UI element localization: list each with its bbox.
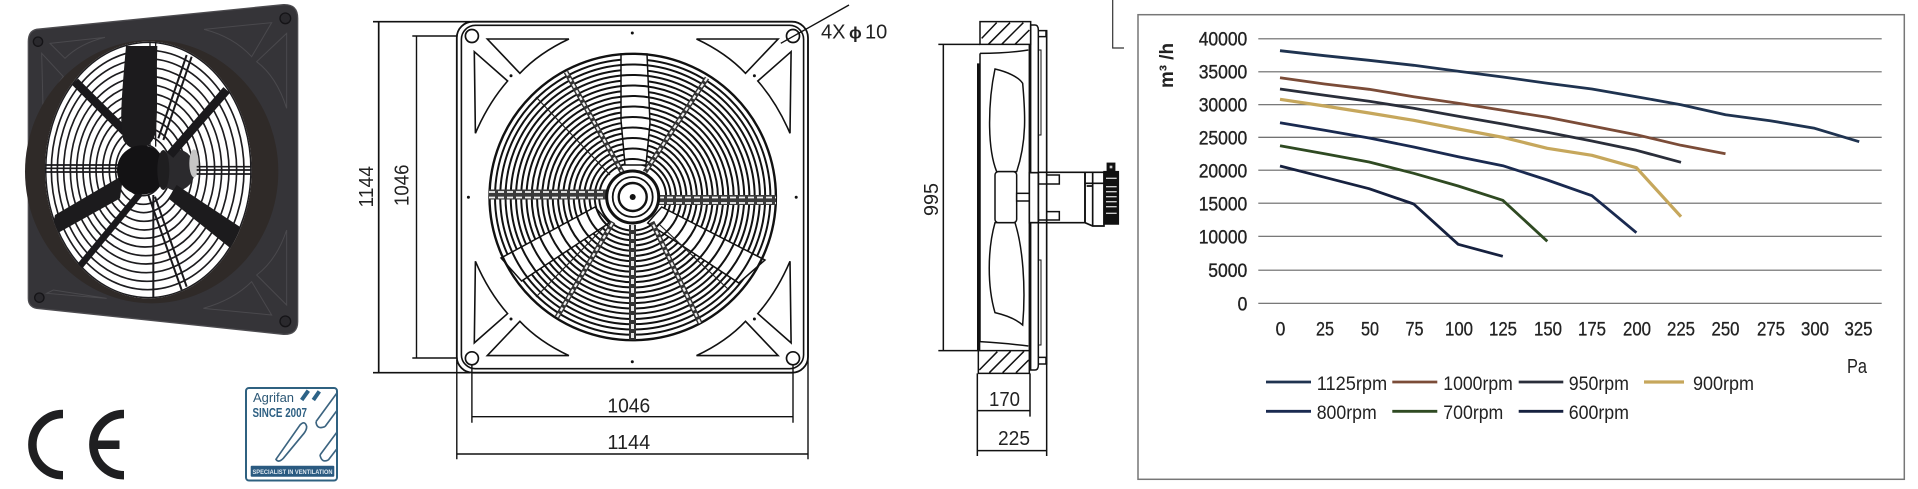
x axis labels: [1276, 320, 1872, 340]
y axis labels: 35000: [1199, 62, 1247, 84]
y axis labels: 20000: [1199, 162, 1247, 182]
guard rings: [46, 42, 251, 298]
venturi ring: [25, 40, 278, 303]
legend: [1266, 374, 1754, 424]
label: depth 225: 225: [998, 428, 1030, 450]
legend 600rpm: [1519, 403, 1629, 424]
corner cutouts: [474, 39, 791, 356]
label: hole spacing 1046 vertical: 1046: [392, 164, 414, 206]
outer frame: [457, 22, 808, 373]
label: depth 170: 170: [989, 389, 1020, 411]
x axis labels: 50: [1361, 320, 1379, 340]
motor body: [1029, 31, 1118, 364]
panel dots: [467, 32, 798, 363]
y axis labels: 40000: [1199, 30, 1247, 50]
curve 1000rpm: [1280, 78, 1726, 154]
corner bolts: [33, 13, 291, 327]
legend 800rpm: 800rpm: [1317, 403, 1377, 424]
CE mark: [32, 414, 124, 475]
x axis labels: 125: [1489, 320, 1517, 340]
y axis labels: 30000: [1199, 96, 1247, 116]
letter C: [32, 414, 63, 475]
y axis labels: 15000: [1199, 194, 1247, 216]
legend 700rpm: 700rpm: [1443, 403, 1503, 424]
y axis labels: 0: [1238, 294, 1247, 316]
mounting plate: [1031, 25, 1038, 370]
curves: [1280, 51, 1859, 256]
legend 1000rpm: [1392, 374, 1513, 395]
inner frame: [461, 25, 804, 369]
lower blade: [989, 223, 1024, 325]
upper blade: [990, 69, 1025, 172]
legend 700rpm: [1392, 403, 1503, 424]
badge since: SINCE 2007: [252, 406, 307, 420]
curve 950rpm: [1280, 89, 1681, 162]
mounting holes: [465, 30, 800, 365]
struts: [45, 42, 253, 298]
legend 1125rpm: [1266, 374, 1387, 395]
product photo: axial fan: [25, 5, 298, 334]
grid lines: [1258, 39, 1882, 303]
label: hole callout: ϕ: [849, 23, 862, 42]
legend 800rpm: [1266, 403, 1377, 424]
x axis title: Pa: [1847, 356, 1868, 378]
badge brand: Agrifan: [253, 390, 294, 405]
hatched top section: [980, 22, 1031, 44]
guard secondary rings: [495, 59, 770, 335]
x axis labels: 0: [1276, 320, 1285, 340]
x axis labels: 225: [1667, 320, 1695, 340]
y axis title: m³ /h: [1157, 43, 1178, 88]
x axis labels: 175: [1578, 320, 1606, 340]
legend 950rpm: 950rpm: [1569, 374, 1629, 395]
x axis labels: 200: [1623, 320, 1651, 340]
x axis labels: 150: [1534, 320, 1562, 340]
curve 1125rpm: [1280, 51, 1859, 142]
label: diameter 995: 995: [921, 183, 943, 216]
legend 1000rpm: 1000rpm: [1443, 374, 1513, 395]
side view technical drawing: [938, 22, 1118, 456]
y axis labels: [1199, 30, 1247, 316]
curve 900rpm: [1280, 99, 1681, 217]
Agrifan badge: [246, 388, 337, 480]
shaft: [1017, 193, 1029, 201]
opening: [45, 42, 252, 298]
performance chart panel: [1138, 15, 1904, 479]
guard and impeller: [45, 42, 253, 298]
label: hole callout: 10: [865, 21, 887, 43]
badge strap text: SPECIALIST IN VENTILATION: [252, 469, 333, 476]
letter E: [93, 414, 124, 475]
y axis labels: 25000: [1199, 128, 1247, 150]
impeller hub: [995, 172, 1017, 223]
y axis labels: 5000: [1208, 261, 1247, 282]
x axis labels: 25: [1316, 320, 1334, 340]
chart frame: [1138, 15, 1904, 479]
guard spokes: [489, 72, 776, 340]
badge pills: [276, 391, 337, 461]
guard edge: [974, 63, 984, 350]
hub: [117, 146, 160, 195]
curve 700rpm: [1280, 146, 1547, 241]
front view technical drawing: [373, 5, 849, 459]
duct profile: [980, 44, 1029, 351]
fan mounting panel: [28, 5, 298, 334]
cropped corner line: [1113, 0, 1124, 48]
legend 1125rpm: 1125rpm: [1317, 374, 1387, 395]
guard main rings: [490, 54, 776, 340]
panel corner recesses: [42, 23, 287, 315]
legend 900rpm: 900rpm: [1693, 374, 1754, 395]
x axis labels: 275: [1757, 320, 1785, 340]
badge frame: [246, 388, 337, 480]
legend 600rpm: 600rpm: [1569, 403, 1629, 424]
x axis labels: 75: [1406, 320, 1424, 340]
hatched bottom section: [978, 351, 1029, 373]
curve 600rpm: [1280, 166, 1503, 256]
hub: [607, 171, 659, 223]
legend 900rpm: [1644, 374, 1754, 395]
label: height 1144: 1144: [356, 166, 378, 208]
label: hole callout: 4X: [821, 21, 845, 43]
curve 800rpm: [1280, 123, 1636, 233]
blades seen through guard: [501, 54, 765, 283]
x axis labels: 325: [1844, 320, 1872, 340]
y axis labels: 10000: [1199, 228, 1247, 248]
blades: [50, 46, 241, 248]
x axis labels: 300: [1801, 320, 1829, 340]
badge strap: [251, 466, 334, 477]
x axis labels: 100: [1445, 320, 1473, 340]
dimension lines front: [373, 5, 849, 459]
label: width 1144: 1144: [607, 432, 650, 454]
legend 950rpm: [1519, 374, 1629, 395]
label: hole spacing 1046 horizontal: 1046: [607, 395, 650, 417]
dimension lines side: [938, 44, 1047, 456]
motor: [166, 150, 194, 190]
x axis labels: 250: [1712, 320, 1740, 340]
